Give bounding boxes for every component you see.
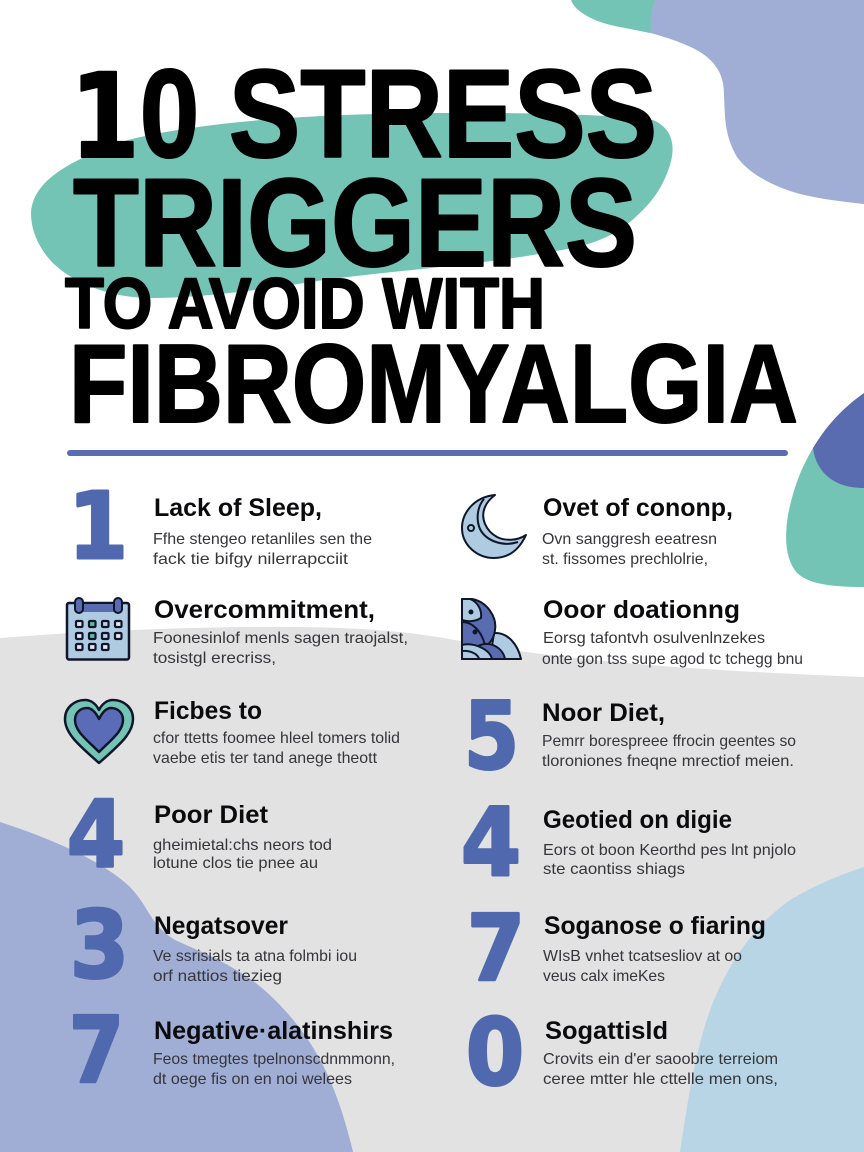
item: Poor Diet: Poor Diet [154,801,269,829]
item: Overcommitment: Foonesinlof menls sagen traojalst, [153,630,408,647]
item: Geotied on digie: ste caontiss shiags [543,861,685,878]
item: Overcommitment: Overcommitment, [154,596,375,624]
item: Ovet of cononp [462,494,733,568]
number 4: 4 [67,781,125,888]
item: Soganose o fiaring [467,897,766,1002]
title: TRIGGERS [73,154,637,293]
item: Negative relationships: Negative·alatinshirs [154,1017,393,1045]
item: Noor Diet: tloroniones fneqne mrectiof meien. [542,753,794,770]
item: Poor Diet: gheimietal:chs neors tod [153,837,332,854]
item: Lack of Sleep: Lack of Sleep, [154,494,322,522]
item: Ovet of cononp: st. fissomes prechlolrie, [542,551,708,568]
icon: wave pattern [462,599,521,659]
item: Negative relationships: Feos tmegtes tpelnonscdnmmonn, [153,1051,395,1068]
title [65,45,798,446]
item: Soganose o fiaring: Soganose o fiaring [544,912,766,940]
item: Sogattisld: Crovits ein d'er saoobre terreiom [543,1051,778,1068]
number 5: 5 [464,682,519,790]
divider rule [67,450,788,456]
blob: right teal [786,400,864,587]
item: Ooor doationng: Eorsg tafontvh osulvenlnzekes [543,630,765,647]
item: Soganose o fiaring: veus calx imeKes [543,968,665,985]
item: Negatsover: Negatsover [154,912,288,940]
item: Ooor doationng: onte gon tss supe agod tc tchegg bnu [542,651,803,668]
item: Ficbes to [65,697,400,767]
item: Negatsover [70,891,357,999]
item: Noor Diet: Pemrr borespreee ffrocin geentes so [542,733,796,750]
item: Overcommitment: tosistgl erecriss, [153,650,276,667]
icon: crescent moon [462,495,526,558]
item: Noor Diet: Noor Diet, [542,699,665,727]
item: Overcommitment [67,596,408,667]
title: TO AVOID WITH [65,265,545,344]
blob: top teal [571,0,680,35]
item: Sogattisld [466,999,778,1106]
item: Ficbes to: cfor ttetts foomee hleel tomers tolid [153,730,400,747]
item: Ovet of cononp: Ovn sanggresh eeatresn [542,531,717,548]
title: 10 STRESS [70,45,657,185]
blob: top right lavender [651,0,864,204]
item: Poor Diet [67,781,332,888]
item: Negatsover: Ve ssrisials ta atna folmbi iou [153,948,357,965]
item: Ficbes to: Ficbes to [154,697,262,725]
item: Lack of Sleep: fack tie bifgy nilerrapcciit [153,551,349,568]
item: Geotied on digie [461,789,796,898]
item: Sogattisld: Sogattisld [545,1017,668,1045]
item: Geotied on digie: Eors ot boon Keorthd pes lnt pnjolo [543,842,796,859]
item: Negative relationships: dt oege fis on en noi welees [153,1071,352,1088]
number 7: 7 [69,999,124,1104]
number 0: 0 [466,999,524,1106]
blob: bottom left lavender [0,822,353,1152]
item: Lack of Sleep [68,473,372,580]
item: Sogattisld: ceree mtter hle cttelle men ons, [543,1071,778,1088]
blob: right blue [813,393,864,488]
icon: calendar [67,598,129,660]
item: Geotied on digie: Geotied on digie [543,806,732,834]
item: Ficbes to: vaebe etis ter tand anege theott [153,750,378,767]
item: Lack of Sleep: Ffhe stengeo retanliles sen the [153,531,372,548]
icon: heart [65,700,133,763]
number 4: 4 [461,789,521,898]
blob: bottom right light blue [680,867,864,1152]
background: gray wave [0,627,864,1152]
number 7: 7 [467,897,525,1002]
item: Soganose o fiaring: WIsB vnhet tcatsesliov at oo [543,948,742,965]
item: Noor Diet [464,682,796,790]
item: Poor Diet: lotune clos tie pnee au [153,855,318,872]
item: Ooor doationng: Ooor doationng [543,596,740,624]
number 1: 1 [68,473,128,580]
item: Negative relationships [69,999,395,1104]
item: Ovet of cononp: Ovet of cononp, [543,494,733,522]
item: Negatsover: orf nattios tiezieg [153,968,282,985]
blob: title teal [31,113,673,298]
item: Ooor doationng [462,596,803,668]
number 3: 3 [70,891,129,999]
